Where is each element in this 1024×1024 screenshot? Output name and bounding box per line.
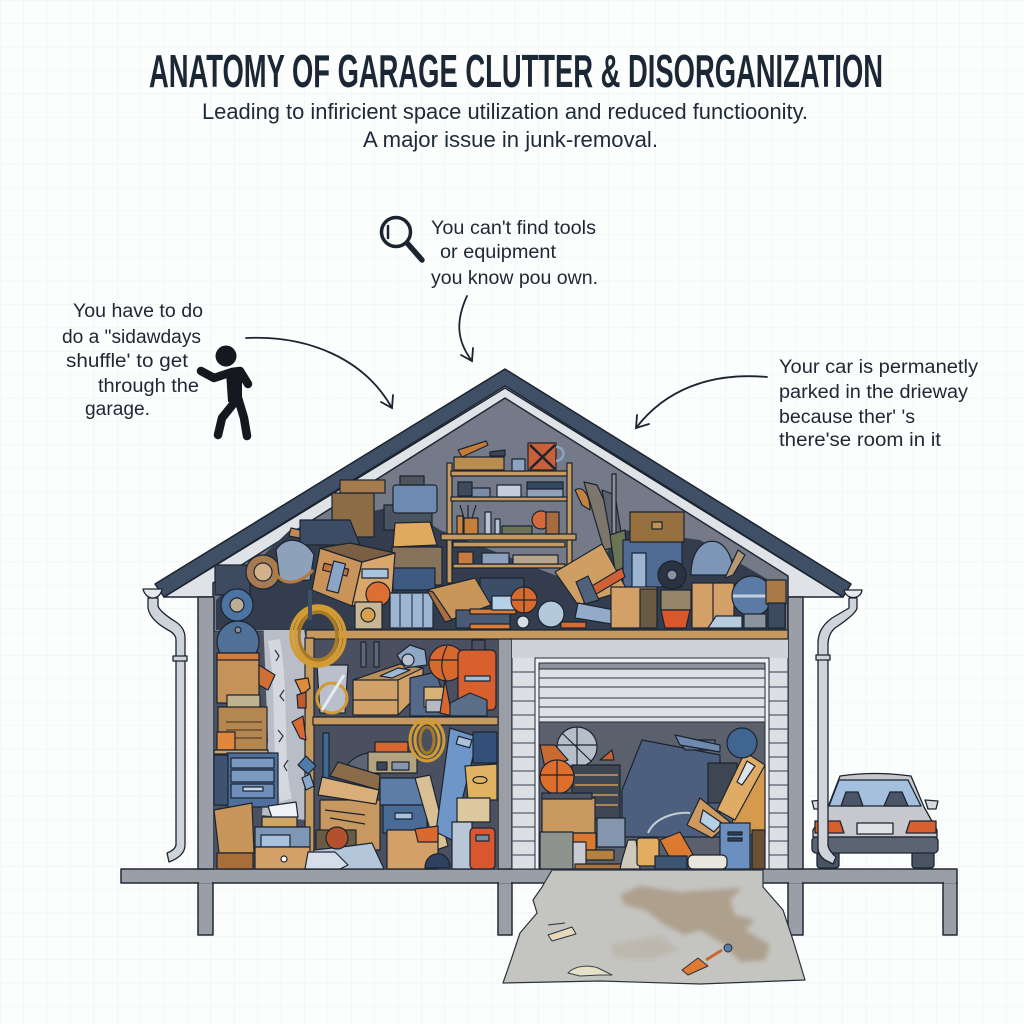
callout: sideways shuffle: garage. — [85, 399, 150, 420]
callout: car parked in driveway: Your car is permanetly — [779, 357, 979, 378]
cardboard box stack — [540, 793, 625, 869]
hanging extension cord coil — [291, 590, 345, 666]
large cardboard carton — [312, 543, 395, 606]
parked car — [812, 774, 938, 868]
arrow: shuffle callout to roof — [246, 338, 393, 408]
callout: can't find tools: You can't find tools — [431, 218, 596, 239]
wooden crate — [214, 707, 268, 754]
blue device and tan box — [561, 587, 657, 628]
icon: shuffling person — [201, 346, 248, 436]
callout: can't find tools: you know pou own. — [431, 268, 598, 289]
left aisle and bays — [214, 632, 306, 869]
callout: sideways shuffle: shuffle' to get — [66, 351, 189, 372]
blue storage crates — [380, 778, 427, 833]
tail lights — [815, 821, 936, 833]
metal storage shelf unit — [441, 441, 576, 583]
gable interior wall — [213, 398, 788, 632]
subtitle: A major issue in junk-removal. — [363, 127, 658, 152]
foundation slab and piers — [121, 869, 957, 935]
dark drawer units — [572, 763, 737, 820]
wooden shelf post and mid shelf — [305, 638, 498, 869]
attic floor shelf — [306, 630, 788, 639]
callout: sideways shuffle: do a "sidawdays — [62, 327, 201, 348]
tan plank — [415, 775, 448, 850]
white sacks and red pot — [305, 827, 384, 869]
open tan box — [353, 664, 423, 715]
debris: roller — [548, 923, 576, 941]
large blue panel — [622, 740, 720, 837]
callout: can't find tools: or equipment — [440, 242, 557, 263]
left wall items: helmet, gear, wheels — [215, 540, 314, 595]
blue bag and tool — [675, 728, 757, 758]
basketball and suitcase — [429, 640, 496, 716]
arrow: search callout to roof — [459, 296, 473, 361]
garage cross-section — [121, 369, 957, 984]
subtitle: Leading to infiricient space utilization and reduced functioonity. — [202, 99, 808, 124]
driveway — [503, 870, 805, 984]
dome and right-side items — [661, 541, 786, 628]
attic clutter — [215, 441, 786, 663]
tan box stack — [217, 653, 275, 708]
right downspout and gutter — [816, 590, 862, 864]
large open cardboard box — [316, 762, 380, 850]
callout: sideways shuffle: You have to do — [73, 301, 203, 322]
leaning blue panel — [436, 728, 478, 840]
callout: can't find tools — [431, 218, 598, 289]
garage interior clutter — [540, 727, 765, 869]
garage interior — [539, 722, 765, 869]
callout: sideways shuffle — [62, 301, 203, 420]
front-left box pile — [214, 802, 310, 869]
blue filing cabinet — [214, 753, 278, 807]
device on box stack — [368, 742, 417, 773]
oil stains — [620, 886, 770, 962]
debris: dust pile — [568, 966, 612, 976]
icon: magnifying glass — [382, 218, 422, 260]
lower bay clutter — [305, 719, 497, 869]
basketball — [540, 745, 614, 794]
upper and lower storage bays — [313, 638, 498, 869]
hanging coil on lower bay — [410, 719, 444, 761]
roof — [155, 369, 851, 597]
globe — [557, 727, 597, 767]
bucket and coil — [317, 665, 348, 713]
narrow walkway through clutter — [262, 590, 306, 820]
license plate — [857, 823, 893, 834]
tall tan tilted case and bag — [687, 752, 765, 838]
navy and yellow items — [452, 732, 497, 869]
siding with garage door — [512, 638, 788, 869]
left bay clutter — [214, 653, 316, 869]
leaning planks — [575, 474, 625, 550]
stacked chests and wheel — [610, 512, 686, 590]
spilled orange and blue bits — [292, 678, 316, 790]
callout: sideways shuffle: through the — [98, 376, 199, 397]
tan front box — [387, 826, 450, 869]
left downspout and gutter — [143, 589, 187, 862]
subtitle — [202, 99, 808, 152]
callout: car parked in driveway: there'se room in it — [779, 430, 942, 451]
tilted right carton — [555, 544, 627, 605]
floor objects — [573, 813, 695, 869]
callout: car parked in driveway: parked in the drieway — [779, 382, 969, 403]
roll-up door slats — [539, 663, 765, 722]
debris: trowel — [682, 944, 732, 975]
walls — [198, 597, 803, 869]
callout: car parked in driveway: because ther' 's — [779, 407, 915, 428]
small machines — [397, 645, 450, 716]
upper bay clutter — [317, 640, 496, 716]
callout: car parked in driveway — [779, 357, 979, 451]
car seats — [841, 792, 908, 806]
arrow: car callout to roof — [636, 376, 767, 428]
back-left stacked boxes — [289, 476, 442, 590]
blue bin and white roll — [688, 823, 765, 869]
middle junk pile — [355, 578, 564, 629]
